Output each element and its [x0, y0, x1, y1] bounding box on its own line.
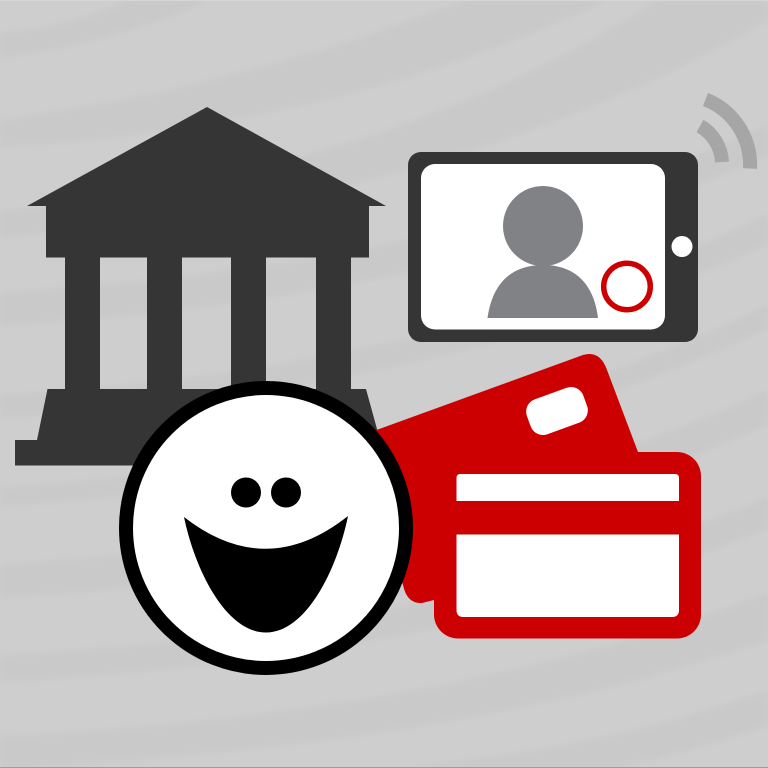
- icon: bank building: [15, 107, 386, 466]
- icon: smiley face: [126, 388, 406, 668]
- icon: wifi signal: [700, 100, 750, 168]
- icon: tablet with video call: [408, 152, 698, 342]
- icon: credit cards: [360, 354, 701, 638]
